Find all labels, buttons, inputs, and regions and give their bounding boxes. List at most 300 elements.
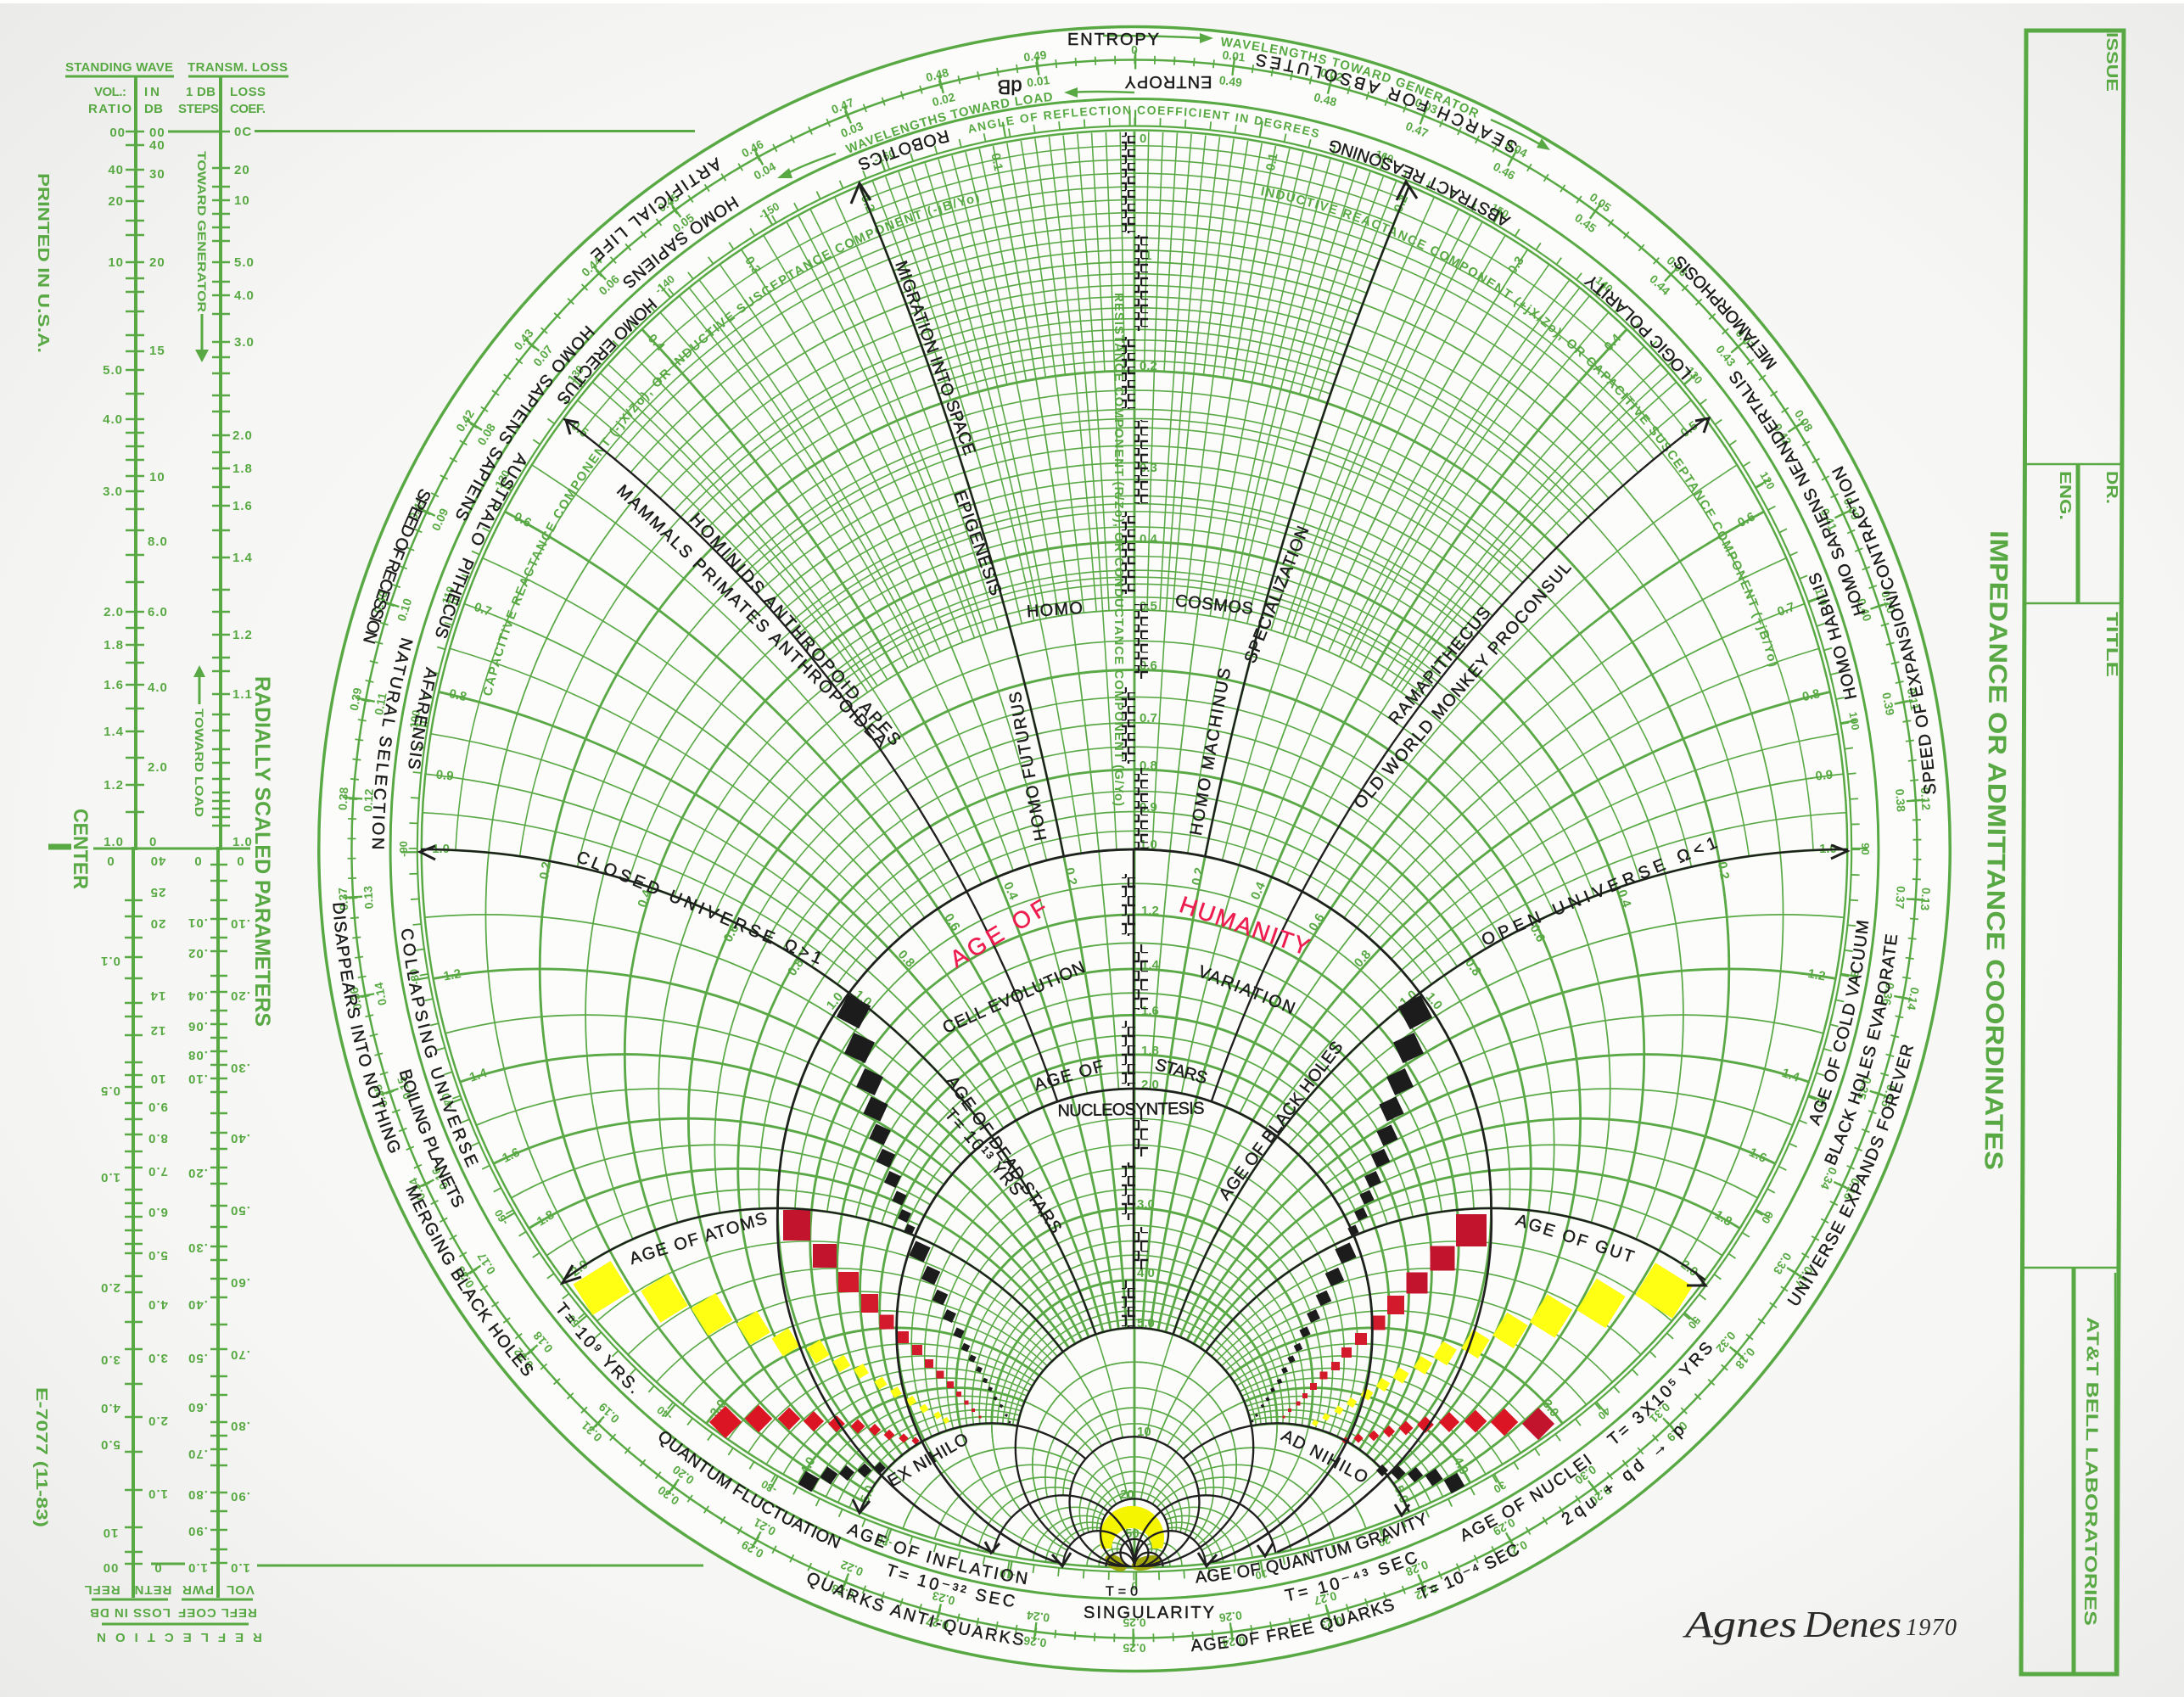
lower ruler labels, printed upside down: 0.5 — [100, 1084, 120, 1098]
loss coefficient column: 1.6 — [232, 499, 253, 513]
handwritten labels around the outer bands — [328, 50, 1940, 1655]
wavelength scale labels: 0.18 — [530, 1329, 556, 1355]
wavelength scale labels: 0.04 — [1504, 137, 1530, 160]
wavelength scale labels: 0.07 — [1733, 326, 1758, 353]
VSWR voltage ratio column: 00 — [109, 126, 126, 140]
reflection angle labels: 160 — [1374, 148, 1395, 165]
mammals primates anthropoidea: MAMMALS PRIMATES ANTHROPOIDEA — [613, 481, 891, 751]
cell evolution: CELL EVOLUTION — [940, 958, 1088, 1038]
label: collapsing universe: COLLAPSING UNIVERSE — [401, 928, 479, 1168]
lower ruler labels, printed upside down: 0 — [236, 854, 244, 868]
toward generator direction — [195, 151, 209, 362]
decibel mark: dB — [997, 75, 1022, 98]
wavelength scale labels: 0.08 — [474, 421, 498, 448]
wavelength scale labels: 0.02 — [1319, 65, 1345, 84]
wavelength scale labels: 0.24 — [1026, 1609, 1050, 1625]
ruler headings: RATIO — [88, 102, 132, 116]
singularity: SINGULARITY — [1084, 1604, 1214, 1622]
labels along the unit resistance circle: 0.6 — [941, 911, 963, 933]
title block frame — [2021, 31, 2124, 1674]
age of: AGE OF — [1033, 1057, 1106, 1095]
wavelength scale labels: 0.11 — [372, 692, 389, 716]
left radially scaled parameter rulers — [33, 60, 703, 1644]
reactance labels along the rim: 5.0 — [1392, 1483, 1411, 1505]
reactance labels along the rim: 1.8 — [1712, 1207, 1734, 1229]
cosmos: COSMOS — [1174, 591, 1254, 619]
reactance labels along the rim: 0.6 — [512, 509, 534, 530]
label: age of nuclei: AGE OF NUCLEI — [1463, 1453, 1592, 1543]
lower ruler labels, printed upside down: REFL COEF — [177, 1605, 257, 1620]
lower ruler labels, printed upside down: 0 — [193, 854, 202, 868]
yellow diagonal, right — [1312, 1263, 1693, 1426]
ruler headings: 1 DB — [186, 85, 216, 99]
reactance labels along the rim: 0.4 — [1601, 331, 1624, 354]
VSWR voltage ratio column: 1.4 — [104, 725, 124, 739]
wavelength scale labels: 0.32 — [511, 1345, 536, 1372]
wavelength scale labels: 0.15 — [395, 1075, 414, 1101]
reactance labels along the rim: 0.5 — [568, 418, 591, 440]
reflection angle labels — [397, 147, 1872, 1593]
loss coefficient column: 1.1 — [232, 687, 253, 702]
VSWR voltage ratio column — [103, 126, 126, 849]
VSWR voltage ratio column: 3.0 — [103, 484, 123, 499]
central axis meander — [1122, 132, 1148, 1329]
label: time of atoms: T= 10⁹ YRS. — [557, 1302, 635, 1393]
wavelength scale labels: 0.29 — [739, 1537, 765, 1561]
old world monkey proconsul: OLD WORLD MONKEY PROCONSUL — [1351, 558, 1575, 813]
lower ruler labels, printed upside down: .70 — [230, 1347, 250, 1362]
center marker: CENTER — [69, 809, 92, 889]
lower ruler labels, printed upside down: .10 — [188, 1072, 208, 1086]
wavelength scale labels: 0.26 — [1022, 1633, 1047, 1650]
lower ruler labels, printed upside down: .50 — [188, 1351, 208, 1365]
wavelength scale labels: 0.49 — [1022, 48, 1048, 64]
scale direction arrows — [777, 33, 1550, 178]
wavelength scale labels: 0.14 — [372, 981, 389, 1006]
resistance axis labels: 10 — [1137, 1425, 1151, 1439]
reflection angle labels: -140 — [652, 272, 677, 296]
VSWR voltage ratio column: 20 — [108, 194, 124, 209]
reflection angle labels: -20 — [875, 1532, 894, 1550]
label: boiling planets: BOILING PLANETS — [399, 1069, 464, 1207]
wavelength scale labels: 0.04 — [751, 160, 778, 182]
loss coefficient column: 1.0 — [232, 835, 253, 849]
labels along the unit resistance circle: 0.4 — [635, 888, 655, 910]
lower ruler labels, printed upside down: PWR — [182, 1582, 214, 1597]
resistance and reactance grid — [421, 132, 1848, 1567]
olive singularity patches — [1102, 1551, 1162, 1575]
lower ruler labels, printed upside down: .80 — [188, 1487, 208, 1502]
wavelength scale labels: 0.41 — [406, 495, 428, 522]
age of atoms: AGE OF ATOMS — [627, 1209, 770, 1269]
resistance axis labels: 0.7 — [1140, 711, 1157, 725]
curved printed scale captions: WAVELENGTHS TOWARD GENERATOR — [1221, 37, 1478, 119]
wavelength scale labels: 0.16 — [1840, 1176, 1863, 1203]
VSWR voltage ratio column: 2.0 — [104, 605, 124, 619]
resistance axis labels: .1 — [1141, 249, 1152, 263]
VSWR voltage ratio column: 5.0 — [103, 363, 123, 378]
return loss in dB column: 2.0 — [148, 760, 168, 775]
wavelength scale labels: 0.46 — [739, 137, 766, 160]
wavelength scale labels: 0.33 — [1771, 1250, 1795, 1277]
labels along the unit resistance circle: 0.2 — [1062, 866, 1079, 887]
lower ruler labels, printed upside down: 4.0 — [100, 1401, 120, 1415]
return loss in dB column: 8.0 — [148, 535, 168, 549]
reactance labels along the rim: 4.0 — [1450, 1454, 1471, 1477]
reactance labels along the rim: 0.1 — [988, 152, 1005, 172]
resistance axis labels: 0 — [1140, 132, 1146, 146]
resistance axis labels: 5.0 — [1137, 1316, 1155, 1330]
entropy, inverted: ENTROPY — [1125, 72, 1212, 91]
wavelength scale labels: 0.36 — [1879, 982, 1897, 1007]
reactance labels along the rim: 1.4 — [468, 1066, 490, 1085]
resistance axis labels: 1.8 — [1141, 1044, 1159, 1058]
lower ruler labels, printed upside down: 25 — [150, 885, 165, 899]
labels along the unit resistance circle: 0.2 — [1715, 860, 1732, 881]
reactance labels along the rim: 0.8 — [1801, 686, 1821, 704]
lower ruler labels, printed upside down: 2.0 — [148, 1414, 168, 1428]
lower ruler labels, printed upside down: .50 — [230, 1203, 250, 1218]
label: australo: AUSTRALO — [472, 451, 526, 545]
lower ruler labels, printed upside down: 1.0 — [100, 1170, 120, 1185]
publisher: AT&T BELL LABORATORIES — [2080, 1317, 2102, 1626]
lower ruler labels, printed upside down: .20 — [230, 989, 250, 1003]
reactance labels along the rim: 0.4 — [645, 331, 668, 355]
wavelength scale labels: 0.25 — [1123, 1641, 1146, 1655]
time of dead stars: T= 10¹³ YRS — [941, 1105, 1026, 1200]
label: artificial life: ARTIFICIAL LIFE — [591, 157, 720, 262]
wavelength scale labels: 0.27 — [1313, 1589, 1338, 1608]
wavelength scale labels: 0.02 — [931, 90, 956, 109]
artist signature: Agnes — [1682, 1604, 1797, 1645]
lower ruler labels, printed upside down: .08 — [188, 1048, 208, 1062]
handwritten labels inside the chart — [574, 31, 1720, 1622]
artist signature: 1970 — [1906, 1615, 1957, 1641]
ramapithecus: RAMAPITHECUS — [1386, 603, 1494, 729]
age of gut: AGE OF GUT — [1514, 1211, 1636, 1267]
lower ruler labels, printed upside down: .02 — [188, 946, 208, 961]
lower ruler labels, printed upside down: 0.1 — [100, 954, 120, 968]
label: speed of expansion: SPEED OF EXPANSION/CONTRACTION — [1829, 463, 1940, 795]
labels along the unit resistance circle: 0.2 — [537, 860, 554, 881]
wavelength scale labels: 0.07 — [530, 342, 556, 369]
label: disappears into nothing: DISAPPEARS INTO NOTHING — [333, 903, 400, 1153]
resistance axis labels: 0.8 — [1140, 759, 1157, 773]
nucleosynthesis: NUCLEOSYNTESIS — [1057, 1099, 1205, 1121]
wavelength scale labels: 0.38 — [336, 787, 350, 810]
reactance labels along the rim: 1.6 — [1747, 1145, 1769, 1166]
wavelength scale labels: 0.34 — [406, 1176, 428, 1202]
red upper diagonal, left — [783, 1210, 981, 1419]
resistance axis labels: 1.0 — [1140, 837, 1157, 852]
labels along the unit resistance circle: 0.4 — [1614, 888, 1634, 910]
lower ruler labels, printed upside down: .10 — [230, 916, 250, 931]
yellow singularity ring — [1100, 1506, 1164, 1549]
epigenesis: EPIGENESIS — [949, 488, 1005, 598]
resistance axis labels: 3.0 — [1137, 1197, 1155, 1212]
labels along the unit resistance circle: 0.8 — [895, 948, 917, 970]
reflection angle labels: 110 — [1812, 586, 1830, 608]
reflection angle labels: 100 — [1846, 711, 1862, 731]
lower ruler labels, printed upside down: .60 — [188, 1400, 208, 1414]
resistance axis labels: 0.6 — [1140, 658, 1157, 673]
wavelength scale labels: 0.01 — [1026, 73, 1050, 89]
wavelength scale labels: 0.06 — [1664, 254, 1690, 279]
label: time of quantum gravity: T= 10⁻⁴³ SEC — [1285, 1552, 1417, 1601]
reflection angle labels: -60 — [492, 1207, 511, 1228]
curved printed scale captions — [480, 35, 1781, 697]
radially scaled parameters caption: RADIALLY SCALED PARAMETERS — [250, 676, 274, 1027]
lower ruler labels, printed upside down: 2.0 — [100, 1280, 120, 1295]
arrowheads — [420, 182, 1847, 1566]
lower ruler labels, printed upside down: 00 — [103, 1560, 118, 1575]
lower ruler labels, printed upside down: .40 — [188, 1297, 208, 1312]
lower ruler labels, printed upside down: VOL — [226, 1582, 255, 1597]
label: merging black holes: MERGING BLACK HOLES — [406, 1185, 533, 1376]
wavelength scale labels: 0.41 — [1818, 506, 1840, 533]
label: homo sapiens: HOMO SAPIENS — [623, 196, 739, 288]
label: natural selection: NATURAL SELECTION — [372, 638, 413, 848]
reactance labels along the rim: 0.2 — [858, 193, 877, 215]
wavelength scale labels: 0.21 — [751, 1515, 778, 1538]
issue field: ISSUE — [2103, 32, 2120, 92]
label: homo sapiens neandertalis: HOMO SAPIENS NEANDERTALIS — [1726, 367, 1869, 618]
wavelength scale labels: 0.20 — [1587, 1483, 1614, 1508]
lower ruler labels, printed upside down: 0 — [106, 854, 115, 868]
wavelength scale labels: 0.22 — [838, 1558, 865, 1579]
lower ruler labels, printed upside down: LOSS IN DB — [89, 1605, 171, 1620]
lower ruler labels, printed upside down: .20 — [188, 1166, 208, 1180]
engineer field: ENG. — [2057, 471, 2074, 520]
wavelength scale labels: 0.05 — [670, 210, 697, 235]
reflection angle labels: 10 — [1254, 1567, 1268, 1582]
reactance labels along the rim: 1.0 — [432, 842, 450, 856]
labels along the unit resistance circle: 0.6 — [1306, 911, 1328, 933]
labels along the unit resistance circle: 0.6 — [721, 922, 742, 944]
wavelength scale labels: 0.26 — [1218, 1609, 1243, 1625]
reflection angle labels: 140 — [1593, 273, 1616, 295]
labels along the unit resistance circle: 0.6 — [1527, 922, 1548, 944]
resistance axis labels: 1.2 — [1141, 904, 1159, 918]
wavelength scale labels: 0.47 — [829, 95, 856, 116]
right title block — [1979, 31, 2124, 1674]
lower ruler labels, printed upside down: 7.0 — [148, 1164, 168, 1179]
reactance and resistance arcs — [421, 187, 1848, 1567]
label: black holes evaporate: BLACK HOLES EVAPORATE — [1822, 933, 1901, 1168]
wavelength scale labels: 0.48 — [1313, 90, 1338, 109]
resistance axis labels: 0.4 — [1140, 532, 1158, 546]
printed in USA note: PRINTED IN U.S.A. — [35, 173, 52, 353]
wavelength scale labels — [336, 42, 1933, 1655]
resistance axis labels: 20 — [1120, 1487, 1134, 1502]
wavelength scale labels: 0.47 — [1404, 119, 1431, 140]
reactance labels along the rim: 2.0 — [1678, 1257, 1700, 1280]
wavelength scale labels: 0.15 — [1879, 1083, 1899, 1109]
wavelength scale labels: 0.40 — [1855, 596, 1874, 623]
VSWR voltage ratio column: 1.0 — [104, 835, 124, 849]
reflection angle labels: -160 — [872, 147, 897, 166]
loss coefficient column: 1.2 — [232, 628, 253, 642]
age of humanity, left: AGE OF — [945, 894, 1052, 972]
wavelength scale labels: 0.19 — [1664, 1419, 1690, 1445]
wavelength scale labels: 0.14 — [1905, 986, 1922, 1011]
wavelength scale labels: 0.12 — [1918, 787, 1933, 811]
lower ruler labels, printed upside down: .01 — [188, 916, 208, 930]
yellow diagonal, left — [574, 1261, 949, 1424]
curved printed scale captions: WAVELENGTHS TOWARD LOAD — [845, 92, 1052, 153]
closed universe: CLOSED UNIVERSE Ω>1 — [574, 848, 825, 968]
title field: TITLE — [2103, 612, 2120, 677]
return loss in dB column: 30 — [149, 167, 165, 182]
reflection angle labels: -70 — [439, 1091, 456, 1111]
black upper diagonal, left — [837, 994, 1011, 1424]
return loss in dB column: 40 — [149, 138, 165, 153]
homo futurus: HOMO FUTURUS — [1006, 690, 1050, 843]
lower ruler labels, printed upside down: REFLECTION — [87, 1630, 262, 1644]
reflection angle labels: -150 — [756, 199, 781, 221]
lower ruler labels, printed upside down: 0 — [154, 1560, 162, 1575]
VSWR voltage ratio column: 1.8 — [104, 638, 124, 652]
lower ruler labels, printed upside down: .90 — [230, 1489, 250, 1504]
lower ruler labels, printed upside down: .80 — [230, 1419, 250, 1433]
wavelength scale labels: 0.03 — [1414, 95, 1440, 116]
ad nihilo: AD NIHILO — [1278, 1426, 1371, 1487]
return loss in dB column — [148, 126, 168, 849]
toward load direction: TOWARD LOAD — [193, 708, 206, 817]
labels along the unit resistance circle: 0.8 — [1462, 956, 1484, 978]
migration into space: MIGRATION INTO SPACE — [891, 259, 979, 457]
VSWR voltage ratio column: 1.2 — [104, 778, 124, 792]
curved printed scale captions: CAPACITIVE REACTANCE COMPONENT (-jX/Zo), OR INDUCTIVE SUSCEPTANCE COMPONENT (-jB/Yo) — [484, 193, 979, 696]
reflection angle labels: -40 — [654, 1403, 675, 1424]
ruler headings: LOSS — [230, 85, 266, 99]
return loss in dB column: 10 — [149, 470, 165, 484]
wavelength scale labels: 0.20 — [669, 1463, 697, 1487]
wavelength scale labels: 0.45 — [1572, 210, 1599, 235]
ex nihilo: EX NIHILO — [885, 1430, 972, 1491]
reactance labels along the rim: 0.9 — [1815, 768, 1834, 784]
wavelength scale labels: 0.33 — [453, 1263, 477, 1291]
label: time of free quarks: T= 10⁻⁴ SEC — [1417, 1544, 1519, 1599]
wavelength scale labels: 0.36 — [347, 986, 364, 1011]
wavelength scale labels: 0.17 — [474, 1250, 498, 1277]
reflection angle labels: -110 — [438, 585, 457, 609]
wavelength scale labels: 0.43 — [1713, 343, 1739, 369]
wavelength scale labels: 0.48 — [925, 65, 950, 84]
label: age of inflation: AGE OF INFLATION — [846, 1524, 1028, 1585]
reflection angle labels: 90 — [1859, 843, 1872, 855]
lower ruler labels, printed upside down: 4.0 — [148, 1297, 168, 1312]
wavelength scale labels: 0.09 — [428, 506, 451, 533]
entropy, upright: ENTROPY — [1067, 31, 1159, 49]
coloured checker squares — [574, 994, 1693, 1575]
label: universe expands forever: UNIVERSE EXPANDS FOREVER — [1787, 1045, 1914, 1305]
lower ruler labels, printed upside down: .06 — [188, 1019, 208, 1033]
wavelength scale labels: 0.28 — [829, 1582, 855, 1603]
reflection angle labels: 80 — [1847, 970, 1862, 984]
lower ruler labels, printed upside down: .04 — [188, 989, 208, 1003]
resistance axis labels — [1120, 132, 1160, 1541]
wavelength scale labels: 0.18 — [1733, 1345, 1758, 1372]
reactance labels along the rim: 4.0 — [798, 1454, 819, 1477]
ruler headings: COEF. — [230, 102, 266, 116]
homo: HOMO — [1026, 599, 1084, 621]
age of humanity, right: HUMANITY — [1176, 891, 1313, 961]
reactance labels along the rim: 1.2 — [1806, 966, 1827, 984]
lower ruler labels, printed upside down: .30 — [230, 1061, 250, 1075]
curved printed scale captions: INDUCTIVE REACTANCE COMPONENT (+jX/Zo), OR CAPACITIVE SUSCEPTANCE COMPONENT (+jB/Yo) — [1261, 187, 1778, 667]
lower ruler labels, printed upside down: 1.0 — [188, 1560, 208, 1575]
reactance labels along the rim: 0.9 — [435, 768, 454, 784]
resistance axis labels: 0.3 — [1140, 461, 1157, 475]
curved printed scale captions: ANGLE OF REFLECTION COEFFICIENT IN DEGREES — [969, 105, 1319, 137]
wavelength scale labels: 0.31 — [1647, 1400, 1673, 1426]
reflection angle labels: -50 — [564, 1313, 585, 1333]
lower ruler labels, printed upside down: 9.0 — [148, 1100, 168, 1114]
wavelength scale labels: 0.42 — [453, 407, 477, 434]
wavelength scale labels: 0.37 — [1893, 886, 1908, 910]
red upper diagonal, right — [1283, 1214, 1487, 1419]
loss coefficient column — [232, 125, 255, 849]
resistance axis labels: 0.9 — [1140, 800, 1157, 815]
VSWR voltage ratio column: 1.6 — [104, 678, 124, 692]
ruler headings: IN — [144, 85, 160, 99]
specialization: SPECIALIZATION — [1241, 524, 1313, 666]
wavelength scale labels: 0.35 — [370, 1083, 390, 1109]
wavelength scale labels: 0.37 — [336, 887, 350, 911]
chart title: IMPEDANCE OR ADMITTANCE COORDINATES — [1979, 530, 2013, 1170]
label: homo habilis: HOMO HABILIS — [1806, 570, 1861, 701]
reactance labels along the rim: 0.6 — [1735, 509, 1757, 530]
labels along the unit resistance circle: 1.0 — [852, 988, 874, 1010]
lower ruler labels, printed upside down: 5.0 — [148, 1248, 168, 1263]
label: robotics: ROBOTICS — [859, 130, 949, 170]
ruler headings — [65, 60, 288, 116]
reactance labels along the rim: 2.0 — [568, 1257, 591, 1280]
loss coefficient column: 2.0 — [232, 428, 253, 443]
reflection angle labels: -120 — [490, 468, 512, 493]
wavelength scale labels: 0.27 — [924, 1614, 950, 1633]
loss coefficient column: 20 — [234, 163, 250, 177]
labels along the unit resistance circle: 1.0 — [1423, 990, 1445, 1012]
resistance axis labels: 0.2 — [1140, 359, 1157, 373]
wavelength scale labels: 0.35 — [1855, 1075, 1874, 1101]
lower ruler labels, printed upside down: .90 — [188, 1524, 208, 1538]
wavelength scale labels: 0.12 — [361, 788, 376, 812]
wavelength scale labels: 0.30 — [655, 1483, 681, 1508]
labels along the unit resistance circle: 0.4 — [1248, 879, 1268, 902]
VSWR voltage ratio column: 4.0 — [103, 412, 123, 427]
reactance labels along the rim — [432, 152, 1837, 1505]
labels along the unit resistance circle: 0.4 — [1000, 880, 1021, 903]
wavelength scale labels: 0.06 — [596, 272, 622, 298]
label: metamorphosis: METAMORPHOSIS — [1671, 252, 1781, 372]
wavelength scale labels: 0.42 — [1771, 421, 1795, 448]
resistance axis labels: 0.5 — [1140, 599, 1157, 613]
reflection angle labels: 120 — [1757, 469, 1778, 491]
label: abstract reasoning: ABSTRACT REASONING — [1326, 135, 1513, 230]
label: time of inflation: T= 10⁻³² SEC — [888, 1563, 1015, 1607]
wavelength scale labels: 0.46 — [1491, 160, 1518, 182]
lower ruler labels, printed upside down: 8.0 — [148, 1131, 168, 1145]
age of dead stars: AGE OF DEAD STARS — [943, 1073, 1065, 1237]
resistance axis labels: 2.0 — [1141, 1078, 1159, 1092]
reflection angle labels: 0 — [1131, 1579, 1138, 1593]
labels along the unit resistance circle: 1.0 — [824, 990, 846, 1012]
wavelength scale labels: 0.39 — [347, 686, 364, 712]
reflection angle labels: 70 — [1813, 1093, 1829, 1109]
red lower diamonds, left — [709, 1405, 920, 1445]
